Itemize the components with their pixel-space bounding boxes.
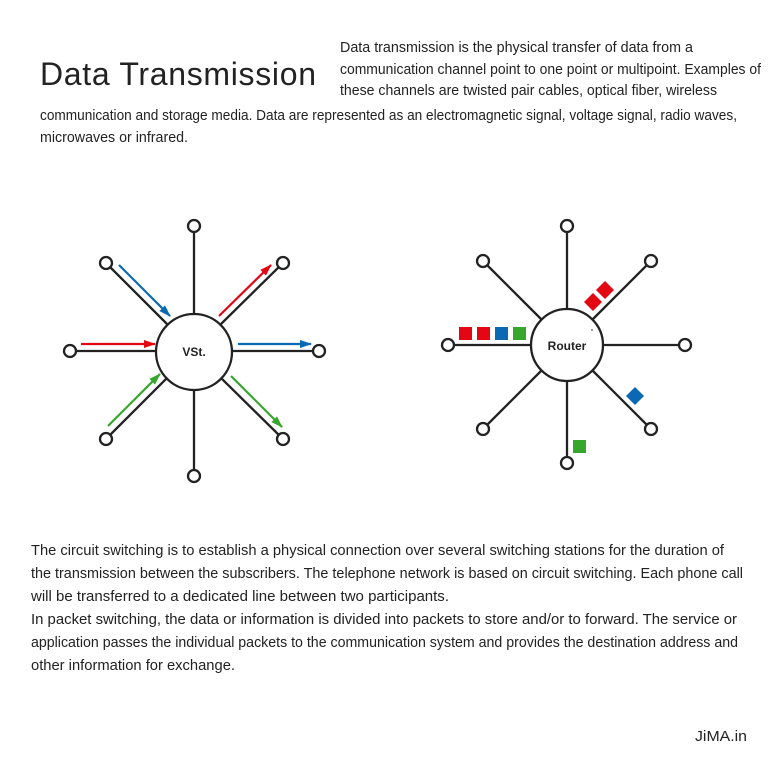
switching station hub [156, 314, 232, 390]
intro paragraph: Data transmission is the physical transfer of data from a [340, 39, 694, 56]
arrows: data flow [81, 265, 311, 427]
circuit switching diagram [64, 220, 325, 482]
switching station hub: VSt. [182, 345, 206, 359]
switching explanation paragraph: the transmission between the subscribers. The telephone network is based on circuit switching. Each phone call [31, 565, 743, 582]
switching explanation paragraph: The circuit switching is to establish a physical connection over several switching stations for the duration of [31, 542, 725, 559]
router hub [531, 309, 603, 381]
switching explanation paragraph: In packet switching, the data or information is divided into packets to store and/or to forward. The service or [31, 611, 737, 628]
intro paragraph: microwaves or infrared. [40, 129, 188, 146]
switching explanation paragraph: application passes the individual packets to the communication system and provides the destination address and [31, 634, 738, 651]
intro paragraph: these channels are twisted pair cables, optical fiber, wireless [340, 82, 717, 99]
packet switching diagram [442, 220, 691, 469]
switching explanation paragraph: will be transferred to a dedicated line between two participants. [30, 588, 449, 605]
router hub: Router [548, 339, 587, 353]
switching explanation paragraph: other information for exchange. [31, 657, 235, 674]
intro paragraph [40, 39, 762, 146]
brand: JiMA.in [695, 728, 747, 745]
title: Data Transmission [40, 56, 316, 92]
packets [459, 281, 644, 453]
switching explanation paragraph [30, 542, 743, 674]
